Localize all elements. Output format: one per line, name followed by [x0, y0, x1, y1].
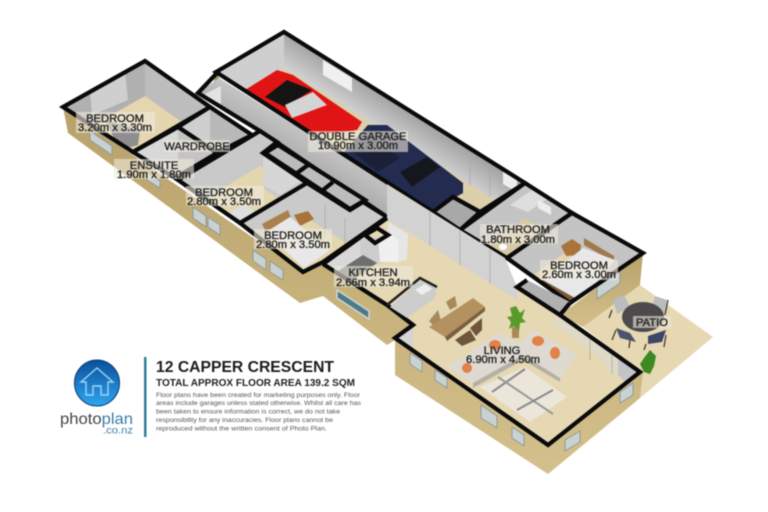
room: wardrobe	[180, 105, 253, 154]
disclaimer text: been taken to ensure information is correct, we do not take	[156, 408, 341, 416]
closets row	[265, 145, 365, 209]
label: bedroom: 3.20m x 3.30m	[78, 122, 152, 134]
label: ensuite	[114, 159, 194, 181]
kitchen island	[387, 278, 437, 318]
label: ensuite: ENSUITE	[130, 160, 178, 172]
label: living: 6.90m x 4.50m	[466, 354, 540, 366]
kitchen fridge and cabinets	[378, 222, 408, 262]
label: bedroom 3	[254, 229, 332, 251]
rug	[480, 367, 567, 422]
exterior brick walls	[63, 72, 643, 474]
room: double garage	[220, 34, 522, 210]
label: bedroom 2: BEDROOM	[195, 187, 253, 199]
closet block under bath	[433, 197, 480, 230]
subtitle: floor area: TOTAL APPROX FLOOR AREA 139.2 SQM	[156, 378, 355, 389]
disclaimer text: responsibility for any inaccuracies. Floor plans cannot be	[156, 417, 334, 424]
car: navy sedan	[343, 125, 463, 210]
label: ensuite: 1.90m x 1.80m	[117, 169, 191, 181]
icon: house badge	[74, 360, 120, 406]
label: kitchen: 2.66m x 3.94m	[336, 277, 410, 289]
label: bedroom 3: 2.80m x 3.50m	[256, 239, 330, 251]
disclaimer text: Floor plans have been created for marketing purposes only. Floor	[156, 392, 360, 399]
label: patio: PATIO	[636, 317, 668, 329]
room: bathroom	[462, 180, 574, 258]
room: kitchen and living	[323, 174, 640, 445]
label: double garage: 10.90m x 3.00m	[318, 140, 398, 152]
label: double garage	[308, 131, 408, 152]
label: bedroom 4: 2.60m x 3.00m	[542, 269, 616, 281]
label: kitchen	[334, 266, 413, 289]
room: ensuite	[133, 127, 217, 187]
label: bedroom 4	[540, 260, 618, 281]
hallway wall face	[198, 78, 433, 250]
room: bedroom 2	[174, 128, 306, 226]
label: bedroom: BEDROOM	[86, 113, 144, 125]
label: kitchen: KITCHEN	[348, 267, 398, 279]
label: bathroom	[480, 224, 558, 246]
room: bedroom top left	[58, 58, 214, 155]
hallway walls	[198, 74, 387, 217]
plant: patio	[640, 350, 656, 374]
label: bedroom 2	[186, 186, 264, 208]
room: bedroom 3	[238, 182, 388, 275]
label: bedroom 4: BEDROOM	[550, 260, 608, 272]
disclaimer text	[156, 392, 361, 432]
disclaimer text: areas include garages unless stated otherwise. Whilst all care has	[156, 400, 361, 407]
car: red convertible	[245, 70, 362, 133]
logo domain: .co.nz	[103, 424, 133, 436]
garage walls	[216, 32, 525, 212]
room labels	[76, 112, 671, 366]
label: living	[466, 345, 540, 366]
patio floor	[583, 285, 713, 398]
dining table	[429, 296, 485, 346]
kitchen closet	[365, 228, 388, 243]
label: double garage: DOUBLE GARAGE	[310, 131, 406, 143]
label: bedroom 2: 2.80m x 3.50m	[187, 196, 261, 208]
label: wardrobe: WARDROBE	[164, 141, 230, 153]
logo: photoplan	[60, 360, 133, 436]
divider bar	[144, 357, 146, 437]
label: bathroom: 1.80m x 3.00m	[481, 234, 555, 246]
logo wordmark: photoplan	[60, 411, 133, 428]
label: bedroom 3: BEDROOM	[264, 230, 322, 242]
label: living: LIVING	[484, 345, 520, 357]
patio table and chairs	[609, 295, 668, 350]
label: bedroom	[76, 112, 155, 134]
label: bathroom: BATHROOM	[486, 224, 550, 236]
hallway doorway	[205, 86, 221, 104]
title: 12 CAPPER CRESCENT	[156, 359, 334, 376]
exterior windows	[90, 131, 633, 451]
bedroom closet	[517, 280, 570, 315]
sofa	[448, 330, 577, 388]
plant: living room	[507, 306, 526, 338]
room: bedroom 4	[506, 210, 648, 306]
disclaimer text: reproduced without the written consent of Photo Plan.	[156, 426, 327, 432]
